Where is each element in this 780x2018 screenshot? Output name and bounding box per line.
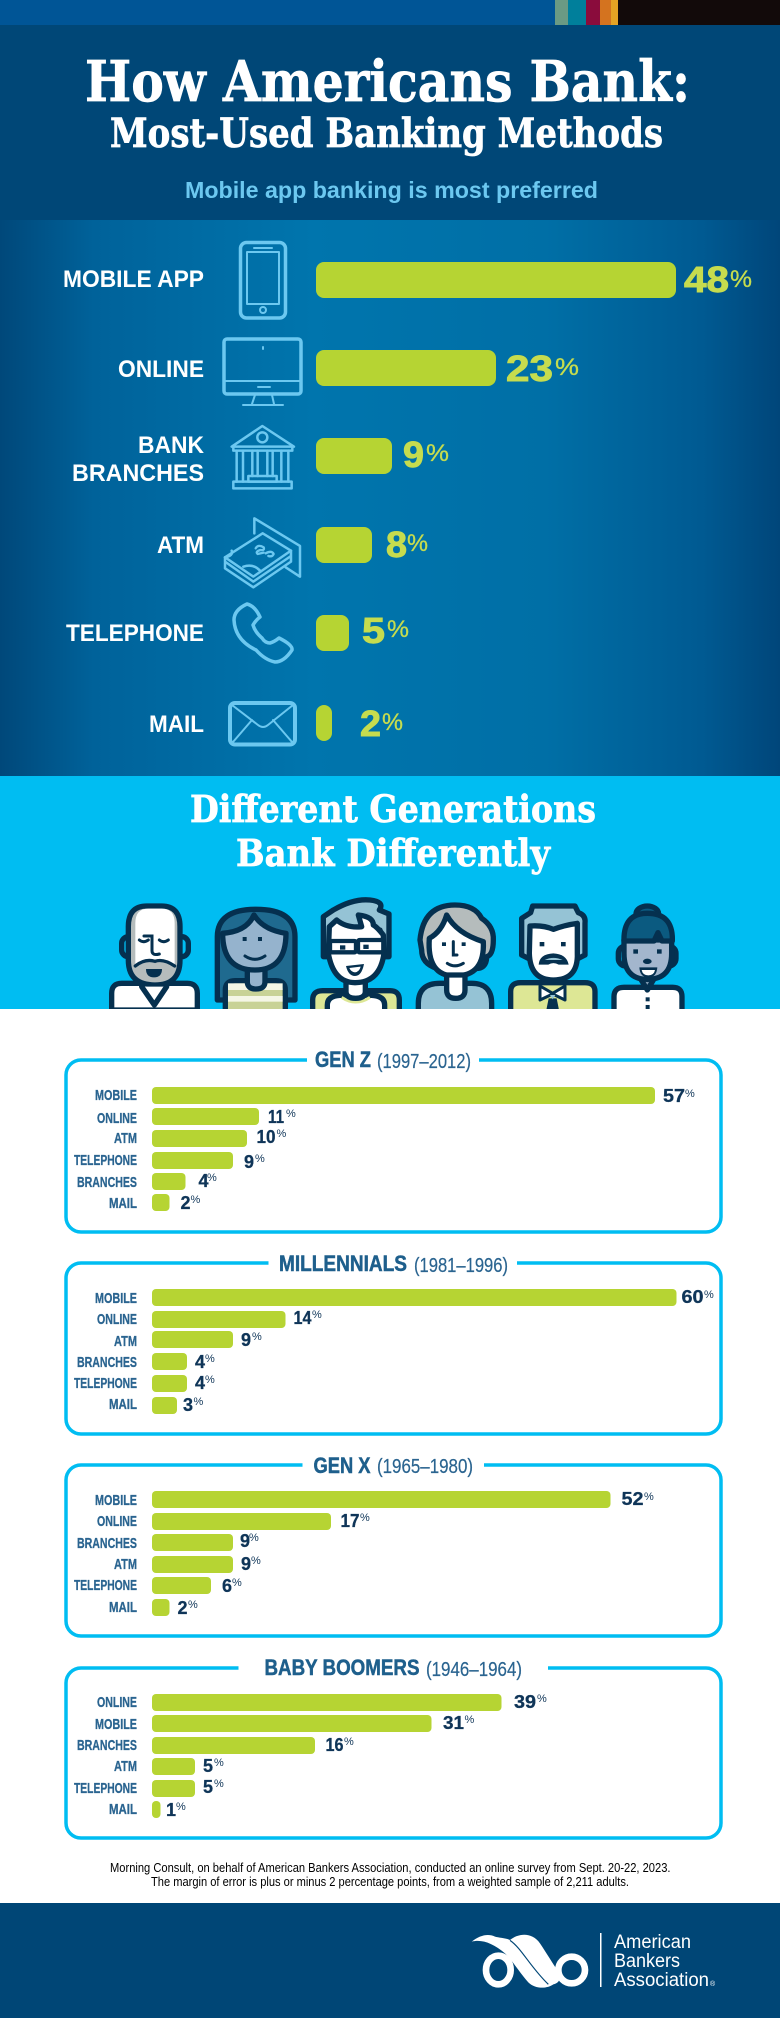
heading: millennials [279,1251,508,1277]
row: bank branches: 9 [403,434,424,475]
header band [0,25,780,220]
logo wordmark [614,1932,716,1991]
icon: envelope [230,703,295,744]
panel: baby boomers [66,1655,721,1838]
row: mobile app: 48 [684,259,729,300]
bars: gen z: % [190,1194,200,1206]
heading: gen x [314,1453,473,1478]
row: mobile app: MOBILE APP [63,266,204,293]
panel: millennials [66,1251,721,1434]
bars: gen x: BRANCHES [77,1535,137,1552]
bars: baby boomers: 5 [203,1777,213,1797]
panel: gen z [66,1047,721,1232]
bars: gen x: 52 [622,1489,644,1509]
bars: millennials: 9 [241,1330,251,1350]
bars: millennials: 3 [183,1395,193,1415]
footnote [110,1861,670,1889]
bars: baby boomers: BRANCHES [77,1737,137,1754]
bars: millennials: MOBILE [95,1290,137,1307]
bars: baby boomers: MOBILE [95,1716,137,1733]
panel: overall banking methods chart [0,220,780,776]
subtitle heading: Most-Used Banking Methods [110,110,663,157]
illustration: woman with bun [614,906,682,1012]
bars: baby boomers: 1 [166,1800,176,1820]
heading: gen z: GEN Z [315,1047,371,1072]
panel: gen x [66,1453,721,1636]
bars: gen z: 4 [198,1171,209,1191]
bars: baby boomers: % [176,1801,186,1813]
icon: desktop monitor [224,339,301,405]
bars: gen z: 2 [180,1193,191,1213]
row: online: ONLINE [118,356,204,383]
bars: baby boomers: ONLINE [97,1694,137,1711]
bars: millennials: % [205,1353,215,1365]
bars: baby boomers: 5 [203,1756,213,1776]
bars: gen x: ONLINE [97,1513,137,1530]
bars: gen z: MOBILE [95,1087,137,1104]
heading [190,787,596,875]
bars: gen x: % [251,1555,261,1567]
bars: gen x: % [232,1577,242,1589]
bars: millennials: % [194,1396,204,1408]
panel: generations header [0,776,780,1012]
bars: millennials: MAIL [109,1396,137,1413]
illustration: man with moustache [511,906,595,1012]
heading: gen z [315,1047,471,1073]
bars: baby boomers: % [344,1736,354,1748]
logo wordmark: American [614,1932,691,1953]
bars: baby boomers: 39 [514,1692,536,1712]
illustration: bald bearded man [112,906,197,1010]
bars: gen x: TELEPHONE [74,1577,137,1594]
bars: gen z: MAIL [109,1195,137,1212]
row: mail: % [382,709,403,736]
bars: gen z: ATM [114,1130,137,1147]
heading: millennials: MILLENNIALS [279,1251,407,1276]
bars: gen z: % [685,1088,695,1100]
row: mail: MAIL [149,711,204,738]
row: telephone: % [387,616,409,643]
bars: gen x: ATM [114,1556,137,1573]
tagline: Mobile app banking is most preferred [185,177,598,203]
heading: baby boomers: BABY BOOMERS [264,1655,420,1680]
row: mobile app [63,242,752,318]
row: mail [149,703,403,744]
bars: gen z: % [286,1108,296,1120]
bars: millennials: % [312,1309,322,1321]
bars: baby boomers: % [537,1693,547,1705]
row: bank branches: % [426,440,449,467]
logo wordmark: Association [614,1970,709,1991]
bars: gen x: 9 [240,1531,250,1551]
top colour strip [0,0,780,25]
bars: millennials: % [704,1289,714,1301]
illustration: woman with long hair [217,909,295,1012]
bars: gen x: 9 [241,1554,251,1574]
heading: gen x: GEN X [314,1453,371,1478]
row: atm [157,518,428,587]
logo wordmark: ® [710,1980,716,1988]
logo wordmark: Bankers [614,1951,680,1972]
bars: millennials [74,1287,714,1415]
bars: millennials: % [205,1374,215,1386]
bars: gen x: MOBILE [95,1492,137,1509]
heading: Bank Differently [236,831,551,875]
bars: gen x [74,1489,654,1618]
row: atm: 8 [386,524,407,565]
row: telephone [66,604,409,662]
bars: baby boomers: 16 [326,1735,344,1755]
bars: gen x: MAIL [109,1599,137,1616]
heading: gen z: (1997–2012) [377,1051,471,1073]
illustration: man with glasses [313,900,399,1012]
footer band [0,1903,780,2018]
bars: gen z: 57 [663,1086,685,1106]
bars: gen x: 2 [178,1598,188,1618]
bars: baby boomers: % [214,1778,224,1790]
bars: millennials: 4 [195,1373,205,1393]
bars: gen z: % [207,1172,217,1184]
bars: gen z: % [276,1128,286,1140]
row: bank branches [72,426,449,488]
row: online [118,339,579,405]
bars: gen x: 6 [222,1576,232,1596]
bars: millennials: ONLINE [97,1311,137,1328]
row: telephone: 5 [362,610,385,651]
title: How Americans Bank: [85,49,690,115]
row: atm: ATM [157,532,204,559]
icon: smartphone [240,242,286,318]
bars: gen z: 11 [268,1107,284,1127]
bars: millennials: % [252,1331,262,1343]
icon: telephone handset [234,604,292,662]
icon: bank building [232,426,294,488]
bars: millennials: 60 [682,1287,704,1307]
bars: gen x: % [188,1599,198,1611]
bars: gen z: 9 [244,1152,254,1172]
bars: baby boomers: % [214,1757,224,1769]
bars: gen z: ONLINE [97,1110,137,1127]
bars: baby boomers: MAIL [109,1801,137,1818]
bars: gen z: BRANCHES [77,1174,137,1191]
bars: millennials: 14 [294,1308,312,1328]
row: online: 23 [506,348,553,389]
heading: baby boomers [264,1655,522,1681]
bars: gen x: % [644,1491,654,1503]
heading: millennials: (1981–1996) [414,1255,508,1277]
bars: gen x: % [360,1512,370,1524]
bars: baby boomers: ATM [114,1758,137,1775]
row: mobile app: % [730,266,752,293]
heading: Different Generations [190,787,596,831]
heading: baby boomers: (1946–1964) [426,1659,522,1681]
bars: millennials: BRANCHES [77,1354,137,1371]
heading: gen x: (1965–1980) [377,1456,473,1478]
bars: gen z: TELEPHONE [74,1152,137,1169]
row: mail: 2 [360,703,381,744]
footnote: The margin of error is plus or minus 2 percentage points, from a weighted sample of 2,211 adults. [151,1875,629,1889]
logo divider [600,1933,602,1987]
bars: gen z: 10 [256,1127,276,1147]
logo mark [472,1935,585,1988]
illustration: woman with grey hair [418,905,493,1012]
white content background [0,1009,780,1903]
bars: gen z [74,1086,695,1213]
bars: baby boomers: 31 [443,1713,464,1733]
row: bank branches: BANK [138,432,205,459]
bars: gen x: 17 [340,1511,360,1531]
bars: gen z: % [255,1153,265,1165]
footnote: Morning Consult, on behalf of American Bankers Association, conducted an online survey from Sept. 20-22, 2023. [110,1861,670,1875]
bars: baby boomers [74,1692,547,1820]
bars: baby boomers: TELEPHONE [74,1780,137,1797]
row: bank branches: BRANCHES [72,460,204,487]
bars: baby boomers: % [464,1714,474,1726]
row: online: % [555,354,579,381]
bars: millennials: 4 [195,1352,205,1372]
row: telephone: TELEPHONE [66,620,204,647]
bars: millennials: TELEPHONE [74,1375,137,1392]
bars: gen x: % [249,1532,259,1544]
row: atm: % [407,530,428,557]
bars: millennials: ATM [114,1333,137,1350]
icon: atm cash [225,518,300,587]
